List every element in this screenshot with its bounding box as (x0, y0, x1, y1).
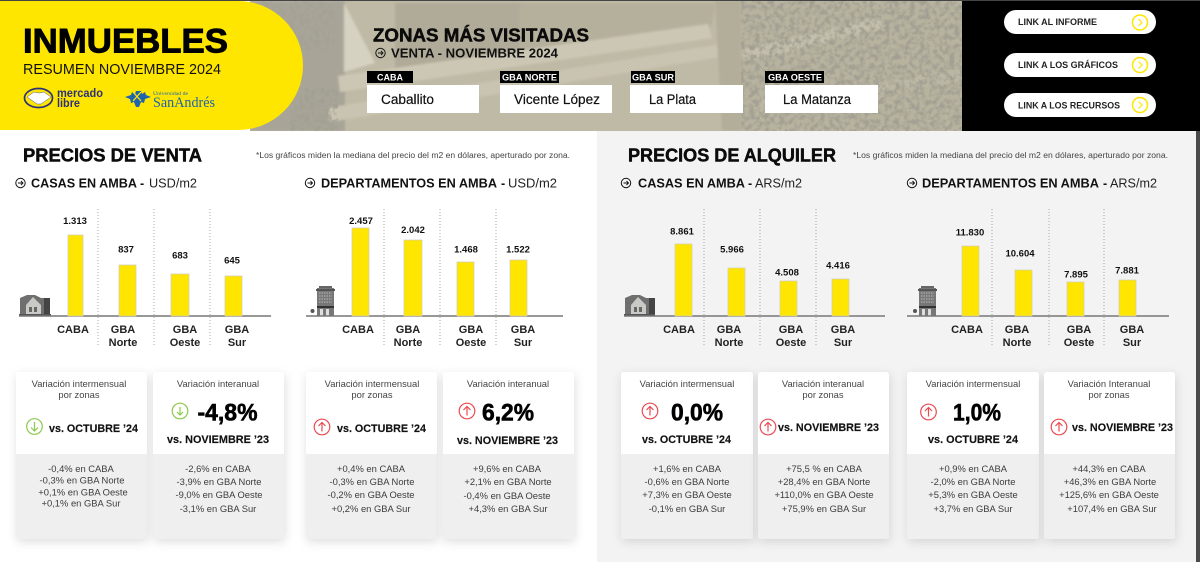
card: casas venta interanual: -9,0% en GBA Oeste (175, 489, 263, 500)
card: casas alquiler interanual: vs. NOVIEMBRE ’23 (778, 422, 879, 434)
card: casas venta intermensual: -0,3% en GBA Norte (40, 474, 124, 486)
card: casas venta intermensual: Variación intermensual (32, 378, 126, 389)
panel: links (962, 1, 1200, 131)
card: departamentos venta interanual: Variación interanual (467, 378, 549, 389)
chart: departamentos alquiler (907, 176, 1169, 349)
logo: Mercado Libre: mercado (57, 88, 103, 100)
icon: house (624, 295, 655, 316)
top edge (0, 0, 1200, 1)
card: casas alquiler intermensual: +7,3% en GBA Oeste (642, 489, 732, 500)
card: departamentos alquiler intermensual: Variación intermensual (926, 378, 1020, 389)
card: casas alquiler interanual: +75,9% en GBA Sur (782, 503, 866, 514)
card: casas alquiler intermensual: vs. OCTUBRE ’24 (642, 434, 732, 446)
logo: Universidad de San Andrés: SanAndrés (153, 95, 215, 111)
card: casas venta interanual: Variación interanual (177, 378, 259, 389)
zone card: GBA Norte: Vicente López (514, 92, 600, 107)
zone card: CABA (367, 71, 479, 113)
card: departamentos venta interanual: 6,2% (482, 400, 534, 426)
chart: casas venta: GBA (111, 324, 135, 336)
chart: casas alquiler: Norte (715, 337, 743, 349)
card: departamentos alquiler interanual: por zonas (1088, 389, 1130, 400)
card: casas alquiler interanual: por zonas (802, 389, 844, 400)
note: alquiler: *Los gráficos miden la mediana del precio del m2 en dólares, aperturado por zona. (853, 151, 1168, 160)
chart heading: ARS/m2 (755, 176, 802, 190)
card: departamentos venta interanual: +9,6% en CABA (473, 463, 542, 474)
logo: Mercado Libre (24, 88, 103, 110)
chart: casas venta: Oeste (170, 337, 200, 349)
icon: building (310, 286, 335, 316)
chart heading: - (501, 176, 505, 190)
chart: casas venta: GBA (173, 324, 197, 336)
chart heading: - (140, 176, 144, 190)
chart: departamentos alquiler: Oeste (1064, 337, 1094, 349)
card: casas alquiler intermensual: -0,1% en GBA Sur (649, 503, 725, 514)
card: casas alquiler interanual: +28,4% en GBA Norte (778, 476, 870, 487)
chart: casas venta: 837 (118, 244, 134, 256)
card: departamentos alquiler intermensual: +3,7% en GBA Sur (934, 503, 1012, 514)
chart: casas alquiler: GBA (717, 324, 741, 336)
chart: departamentos venta (305, 176, 563, 349)
card: casas alquiler intermensual: 0,0% (671, 400, 723, 426)
zone card: CABA: CABA (377, 72, 403, 82)
chart: departamentos alquiler: GBA (1005, 324, 1029, 336)
chart: departamentos venta: Norte (394, 337, 422, 349)
card: casas alquiler intermensual: -0,6% en GBA Norte (645, 476, 729, 487)
chart: departamentos venta: Sur (514, 337, 533, 349)
chart heading (907, 176, 1157, 190)
icon: building (913, 286, 937, 316)
button: link a los gráficos (1004, 53, 1156, 77)
chart: departamentos alquiler: 11.830 (956, 228, 984, 238)
logo: Universidad de San Andrés: Universidad de (153, 91, 189, 97)
heading: precios de venta: PRECIOS DE VENTA (23, 146, 202, 166)
chart: casas alquiler: 5.966 (720, 244, 744, 256)
chart: casas alquiler: Oeste (776, 337, 806, 349)
zone card: GBA Sur (630, 71, 743, 113)
chart heading: USD/m2 (508, 176, 557, 190)
chart: departamentos venta: CABA (342, 324, 374, 336)
chart: casas venta: Sur (228, 337, 247, 349)
card: departamentos venta intermensual: +0,4% en CABA (337, 463, 406, 474)
card: casas venta intermensual: +0,1% en GBA Sur (42, 498, 120, 508)
chart: departamentos alquiler: Norte (1003, 337, 1031, 349)
subtitle: RESUMEN NOVIEMBRE 2024 (23, 62, 221, 78)
chart: casas alquiler: 4.508 (775, 268, 799, 278)
card: departamentos alquiler interanual: Variación Interanual (1068, 378, 1150, 389)
card: casas venta interanual: -3,1% en GBA Sur (180, 503, 256, 514)
chart: departamentos venta: 1.522 (506, 244, 530, 256)
chart: departamentos venta: Oeste (456, 337, 486, 349)
card: casas venta intermensual (16, 372, 147, 539)
chart: casas alquiler: GBA (779, 324, 803, 336)
card: casas alquiler intermensual: +1,6% en CABA (653, 463, 722, 474)
note: venta: *Los gráficos miden la mediana del precio del m2 en dólares, aperturado por zona. (256, 151, 570, 160)
card: departamentos alquiler intermensual: 1,0% (953, 400, 1001, 426)
card: casas alquiler interanual: Variación interanual (782, 378, 864, 389)
chart: departamentos venta: 1.468 (454, 244, 478, 256)
chart: casas alquiler: Sur (834, 337, 853, 349)
button: link al informe: LINK AL INFORME (1018, 17, 1097, 27)
card: departamentos venta interanual: +2,1% en GBA Norte (464, 476, 552, 487)
card: departamentos alquiler interanual: +107,4% en GBA Sur (1067, 503, 1157, 514)
card: casas alquiler interanual: +75,5 % en CABA (786, 463, 863, 474)
chart: departamentos alquiler: GBA (1067, 324, 1091, 336)
card: departamentos alquiler interanual: +46,3% en GBA Norte (1064, 476, 1156, 487)
chart: departamentos alquiler: GBA (1120, 324, 1144, 336)
card: departamentos venta intermensual: -0,3% en GBA Norte (330, 476, 414, 487)
chart: casas alquiler: CABA (663, 324, 695, 336)
logo: Universidad de San Andrés (125, 91, 215, 111)
chart heading (621, 176, 802, 190)
chart heading (16, 176, 197, 190)
chart heading: DEPARTAMENTOS EN AMBA (321, 176, 497, 190)
card: departamentos alquiler intermensual (907, 372, 1039, 539)
chart heading: USD/m2 (149, 176, 197, 190)
chart: departamentos venta: GBA (459, 324, 483, 336)
card: departamentos venta intermensual (306, 372, 437, 539)
zone card: GBA Oeste (765, 71, 878, 113)
card: departamentos venta intermensual: -0,2% en GBA Oeste (327, 489, 415, 500)
card: casas venta interanual: vs. NOVIEMBRE ’23 (167, 434, 269, 446)
chart: casas venta: 1.313 (63, 216, 87, 227)
button: link a los recursos: LINK A LOS RECURSOS (1018, 100, 1120, 110)
chart: casas venta: 645 (224, 256, 241, 266)
chart: departamentos alquiler: 7.895 (1064, 270, 1089, 280)
button: link al informe (1004, 10, 1156, 34)
chart: casas venta (16, 176, 271, 349)
card: departamentos venta interanual: vs. NOVIEMBRE ’23 (457, 435, 558, 447)
chart: departamentos alquiler: 10.604 (1005, 248, 1035, 260)
zone card: GBA Oeste: GBA OESTE (768, 72, 822, 82)
chart heading: CASAS EN AMBA (638, 176, 745, 190)
chart heading: - (1103, 176, 1107, 190)
chart: casas alquiler: 4.416 (826, 260, 850, 272)
chart: departamentos alquiler: 7.881 (1115, 266, 1140, 276)
right edge (1196, 131, 1200, 562)
chart: departamentos venta: 2.042 (401, 225, 425, 236)
card: casas venta intermensual: +0,1% en GBA Oeste (38, 486, 128, 498)
heading: precios de alquiler: PRECIOS DE ALQUILER (628, 146, 836, 166)
card: departamentos venta intermensual: Variación intermensual (325, 378, 419, 389)
zone card: GBA Norte: GBA NORTE (502, 72, 557, 82)
chart: departamentos venta: GBA (511, 324, 535, 336)
title: INMUEBLES (23, 22, 228, 60)
card: departamentos alquiler intermensual: +5,3% en GBA Oeste (928, 489, 1018, 500)
chart heading: ARS/m2 (1110, 176, 1157, 190)
card: departamentos venta intermensual: por zonas (351, 389, 393, 400)
button: link a los recursos (1004, 93, 1156, 117)
zone card: GBA Sur: GBA SUR (632, 72, 675, 82)
zone card: GBA Sur: La Plata (649, 92, 696, 107)
card: casas venta intermensual: -0,4% en CABA (48, 463, 115, 474)
card: departamentos venta intermensual: +0,2% en GBA Sur (332, 503, 410, 514)
chart: departamentos alquiler: CABA (951, 324, 983, 336)
chart: casas venta: GBA (225, 324, 249, 336)
card: departamentos alquiler intermensual: -2,0% en GBA Norte (931, 476, 1015, 487)
card: casas alquiler interanual (758, 372, 889, 539)
subheading: venta noviembre: VENTA - NOVIEMBRE 2024 (391, 46, 558, 60)
chart: casas venta: Norte (109, 337, 137, 349)
icon: house (19, 295, 51, 316)
card: departamentos alquiler interanual: +44,3% en CABA (1072, 463, 1146, 474)
card: departamentos alquiler interanual: +125,6% en GBA Oeste (1059, 489, 1159, 500)
chart: casas alquiler: 8.861 (670, 226, 695, 238)
card: casas venta intermensual: vs. OCTUBRE ’24 (49, 423, 139, 435)
panel: rental background (597, 131, 1197, 562)
chart heading: - (748, 176, 752, 190)
heading: zonas más visitadas: ZONAS MÁS VISITADAS (373, 24, 589, 46)
card: casas alquiler interanual: +110,0% en GBA Oeste (774, 489, 874, 500)
card: casas alquiler intermensual: Variación intermensual (640, 378, 734, 389)
card: casas alquiler intermensual (621, 372, 753, 539)
chart: casas alquiler (621, 176, 885, 349)
chart: casas alquiler: GBA (831, 324, 855, 336)
chart: casas venta: CABA (57, 324, 89, 336)
panel: yellow title pill (0, 1, 303, 130)
logo: Mercado Libre: libre (57, 98, 80, 110)
photo banner (250, 1, 962, 131)
card: casas venta interanual: -3,9% en GBA Norte (177, 476, 261, 487)
card: departamentos alquiler intermensual: vs. OCTUBRE ’24 (928, 434, 1019, 446)
chart: casas venta: 683 (172, 250, 188, 262)
chart heading: DEPARTAMENTOS EN AMBA (922, 176, 1099, 190)
card: departamentos venta intermensual: vs. OCTUBRE ’24 (337, 423, 427, 435)
card: casas venta interanual: -4,8% (198, 400, 258, 426)
card: departamentos venta interanual: +4,3% en GBA Sur (469, 503, 547, 514)
card: departamentos venta interanual: -0,4% en GBA Oeste (463, 490, 551, 501)
chart: departamentos venta: 2.457 (349, 216, 373, 227)
card: departamentos alquiler interanual (1044, 372, 1175, 539)
zone card: GBA Oeste: La Matanza (783, 92, 851, 107)
zone card: GBA Norte (500, 71, 612, 113)
chart heading (305, 176, 557, 190)
zone card: CABA: Caballito (381, 92, 434, 107)
card: departamentos alquiler intermensual: +0,9% en CABA (939, 463, 1008, 474)
card: casas venta interanual: -2,6% en CABA (185, 463, 252, 474)
card: departamentos alquiler interanual: vs. NOVIEMBRE ’23 (1072, 422, 1173, 434)
card: casas venta intermensual: por zonas (58, 389, 100, 400)
card: departamentos venta interanual (443, 372, 574, 539)
chart heading: CASAS EN AMBA (31, 176, 137, 190)
chart: departamentos alquiler: Sur (1123, 337, 1142, 349)
card: casas venta interanual (153, 372, 284, 539)
button: link a los gráficos: LINK A LOS GRÁFICOS (1018, 60, 1118, 70)
chart: departamentos venta: GBA (396, 324, 420, 336)
